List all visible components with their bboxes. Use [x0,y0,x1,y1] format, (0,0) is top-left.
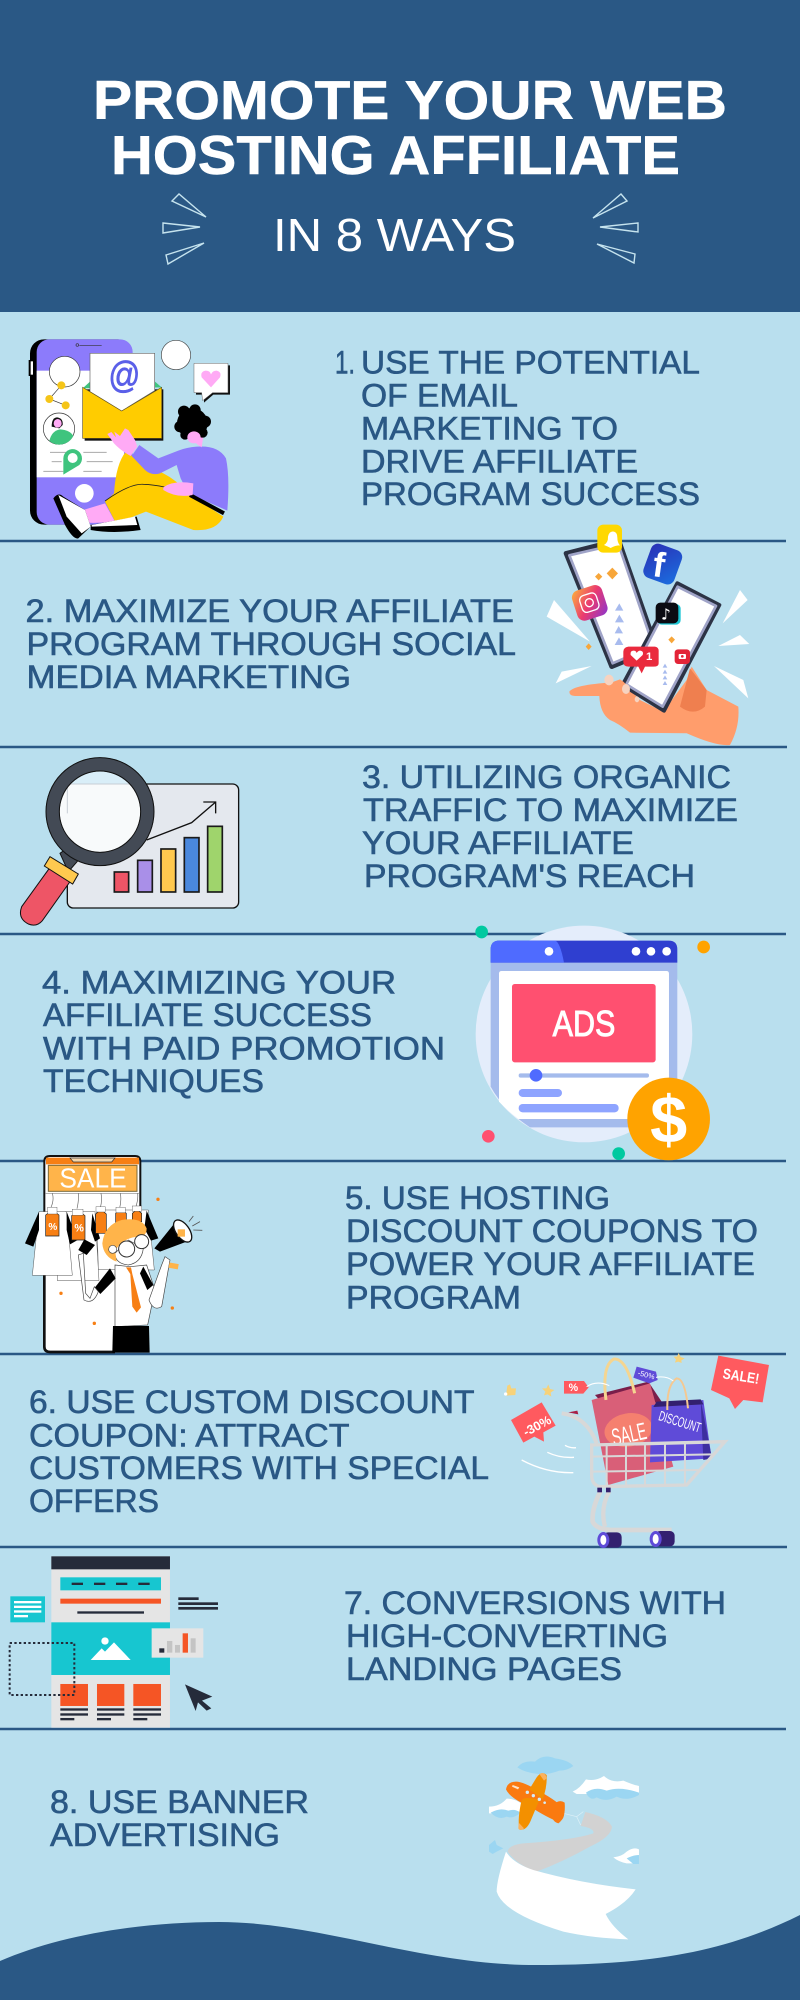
subtitle: IN 8 WAYS [273,209,516,261]
panel: 2 social media marketing [26,525,749,745]
panel: 3 organic traffic [20,758,738,925]
icon: hand holding phones with social apps [547,525,749,745]
text: item 4: TECHNIQUES [43,1063,264,1099]
panel: 5 discount coupons [25,1155,758,1353]
text: item 1: OF EMAIL [361,378,518,414]
text: item 3 [362,759,738,894]
icon: ads browser window with dollar coin [475,926,710,1160]
icon: magnifier over bar chart [20,758,239,925]
text: item 6: CUSTOMERS WITH SPECIAL [29,1450,489,1486]
text: item 4: AFFILIATE SUCCESS [43,997,372,1033]
icon: hand holding phones with social apps: 1 [646,651,652,663]
icon: shopping cart with sale bags: SALE [609,1418,649,1452]
panel: 1 email marketing [29,339,700,538]
text: item 1: PROGRAM SUCCESS [361,476,700,512]
text: item 7: HIGH-CONVERTING [346,1618,668,1654]
panel: 7 landing pages [10,1556,726,1728]
icon: ads browser window with dollar coin: $ [650,1084,687,1158]
text: item 8: 8. USE BANNER [50,1784,309,1820]
icon: hand holding phones with social apps: ♪ [661,605,671,623]
text: item 3: PROGRAM'S REACH [364,858,695,894]
title: HOSTING AFFILIATE [111,124,680,186]
text: item 3: 3. UTILIZING ORGANIC [362,759,731,795]
panel: 8 banner advertising [50,1756,639,1939]
text: item 5: DISCOUNT COUPONS TO [346,1213,758,1249]
icon: shopping cart with sale bags [504,1353,769,1548]
text: item 2: 2. MAXIMIZE YOUR AFFILIATE [26,593,514,629]
icon: shopping cart with sale bags: -50% [637,1368,656,1382]
text: item 1: 1. [335,344,355,380]
title [93,69,727,186]
icon: hand holding phones with social apps: f [650,545,668,585]
text: item 6: OFFERS [29,1483,159,1519]
text: item 5: POWER YOUR AFFILIATE [346,1246,755,1282]
text: item 5: PROGRAM [346,1280,521,1316]
panel: 4 paid promotion [42,926,710,1160]
text: item 3: TRAFFIC TO MAXIMIZE [363,792,738,828]
text: item 7: 7. CONVERSIONS WITH [344,1585,726,1621]
text: item 4: 4. MAXIMIZING YOUR [42,964,396,1000]
icon: left sparks [163,194,206,264]
icon: shopping cart with sale bags: % [569,1382,579,1394]
text: item 1: DRIVE AFFILIATE [361,444,638,480]
icon: shopping cart with sale bags: DISCOUNT [657,1407,703,1436]
icon: landing page wireframe [10,1556,218,1728]
text: item 1: USE THE POTENTIAL [361,344,700,380]
text: item 6 [29,1384,489,1519]
text: item 7: LANDING PAGES [346,1651,622,1687]
text: item 4: WITH PAID PROMOTION [43,1030,445,1066]
text: item 4 [42,964,445,1099]
text: item 5: 5. USE HOSTING [345,1180,610,1216]
text: item 1 [335,344,700,512]
icon: shopping cart with sale bags: -30% [521,1413,554,1439]
icon: woman with email and phone [29,339,230,538]
icon: sale man with megaphone on phone: % [48,1222,57,1233]
panel: header banner [0,0,800,312]
icon: sale man with megaphone on phone [25,1155,202,1353]
text: item 7 [344,1585,726,1687]
text: item 8: ADVERTISING [50,1817,280,1853]
text: item 5 [345,1180,758,1316]
title: PROMOTE YOUR WEB [93,69,727,131]
text: item 2 [26,593,516,695]
text: item 6: COUPON: ATTRACT [29,1418,350,1454]
icon: woman with email and phone: @ [108,354,140,395]
icon: sale man with megaphone on phone: SALE [59,1162,127,1193]
icon: shopping cart with sale bags: SALE! [722,1366,760,1388]
text: item 2: MEDIA MARKETING [26,659,351,695]
text: item 2: PROGRAM THROUGH SOCIAL [26,626,516,662]
icon: sale man with megaphone on phone: % [74,1222,84,1234]
footer wave [0,1915,800,2000]
icon: plane towing banner [489,1756,639,1939]
text: item 6: 6. USE CUSTOM DISCOUNT [29,1384,474,1420]
icon: ads browser window with dollar coin: ADS [553,1003,615,1044]
icon: right sparks [593,194,638,263]
text: item 8 [50,1784,309,1853]
text: item 1: MARKETING TO [361,410,618,446]
text: item 3: YOUR AFFILIATE [362,825,634,861]
panel: 6 custom coupon [29,1353,769,1548]
